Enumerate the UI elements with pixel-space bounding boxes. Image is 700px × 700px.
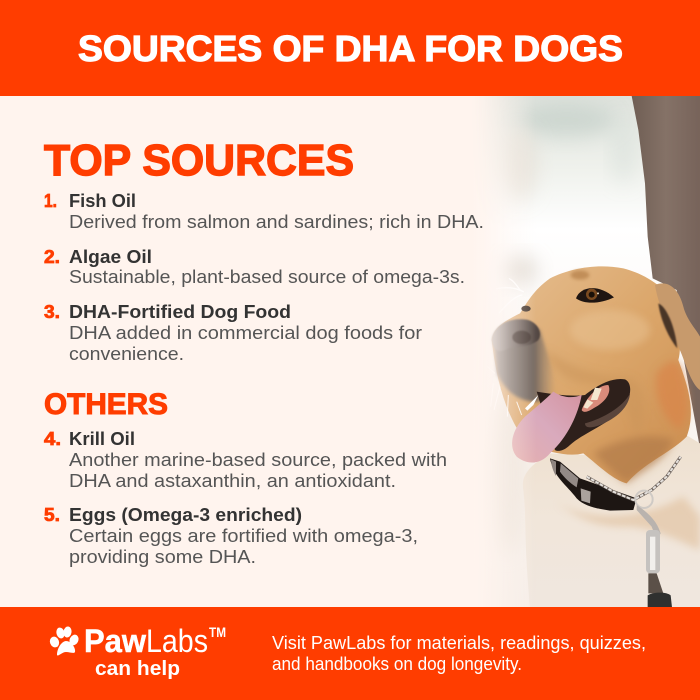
item 3: DHA-fortified dog food: convenience. xyxy=(69,344,184,364)
item 1: fish oil: Derived from salmon and sardines; rich in DHA. xyxy=(69,212,484,232)
muzzle grey xyxy=(493,322,556,402)
item 5: eggs: providing some DHA. xyxy=(69,547,256,567)
item 2: algae oil: Algae Oil xyxy=(69,247,152,267)
item 1: fish oil xyxy=(44,191,484,232)
chin whiskers xyxy=(500,386,522,416)
item 5: eggs xyxy=(44,505,418,567)
tree trunk xyxy=(632,96,700,448)
item 3: DHA-fortified dog food: DHA-Fortified Dog Food xyxy=(69,302,291,322)
forehead highlight xyxy=(570,310,650,350)
item 5: eggs: Eggs (Omega-3 enriched) xyxy=(69,505,302,525)
photo background xyxy=(490,96,676,607)
logo wordmark: TM xyxy=(209,624,226,640)
second eye sliver xyxy=(521,306,531,312)
left fade overlay xyxy=(470,96,536,607)
item 1: fish oil: Fish Oil xyxy=(69,191,136,211)
item 4: krill oil: Krill Oil xyxy=(69,429,135,449)
logo tagline: can help xyxy=(95,658,180,680)
tooth highlight xyxy=(525,395,538,411)
item 3: DHA-fortified dog food: 3. xyxy=(44,302,60,322)
header band xyxy=(0,0,700,96)
eye xyxy=(576,288,614,303)
item 5: eggs: 5. xyxy=(44,505,60,525)
footer call to action: Visit PawLabs for materials, readings, quizzes, xyxy=(272,633,646,653)
item 5: eggs: Certain eggs are fortified with omega-3, xyxy=(69,526,418,546)
neck shading xyxy=(547,350,688,483)
footer band xyxy=(0,607,700,700)
item 1: fish oil: 1. xyxy=(44,191,57,211)
leash clip xyxy=(637,505,672,607)
lower lip xyxy=(585,393,630,427)
photo: golden labrador dog xyxy=(470,96,700,607)
icon: paw print xyxy=(48,626,80,655)
heading: others: OTHERS xyxy=(44,388,168,421)
ear inner shadow xyxy=(658,303,677,348)
collar xyxy=(550,458,637,511)
title: SOURCES OF DHA FOR DOGS xyxy=(78,28,623,69)
logo wordmark xyxy=(84,623,226,659)
dog head xyxy=(492,266,691,483)
page background xyxy=(0,96,700,607)
brow mark xyxy=(571,270,589,280)
item 4: krill oil: 4. xyxy=(44,429,61,449)
item 2: algae oil: 2. xyxy=(44,247,60,267)
item 3: DHA-fortified dog food: DHA added in commercial dog foods for xyxy=(69,323,422,343)
item 4: krill oil: Another marine-based source, packed with xyxy=(69,450,447,470)
nose xyxy=(492,319,540,351)
footer call to action: and handbooks on dog longevity. xyxy=(272,654,522,674)
item 4: krill oil xyxy=(44,429,447,491)
logo wordmark: Paw xyxy=(84,623,146,659)
item 2: algae oil xyxy=(44,247,465,287)
item 2: algae oil: Sustainable, plant-based source of omega-3s. xyxy=(69,267,465,287)
logo wordmark: Labs xyxy=(146,623,208,659)
item 3: DHA-fortified dog food xyxy=(44,302,422,364)
gum and teeth xyxy=(582,385,609,412)
ear xyxy=(655,283,700,390)
footer call to action xyxy=(272,633,646,674)
chest shading xyxy=(553,497,700,550)
dog chest and body xyxy=(523,433,700,607)
open mouth xyxy=(537,379,630,451)
chain xyxy=(587,457,681,508)
heading: top sources: TOP SOURCES xyxy=(44,136,354,185)
tongue xyxy=(512,392,582,463)
whiskers at brow xyxy=(509,278,524,292)
item 4: krill oil: DHA and astaxanthin, an antioxidant. xyxy=(69,471,396,491)
